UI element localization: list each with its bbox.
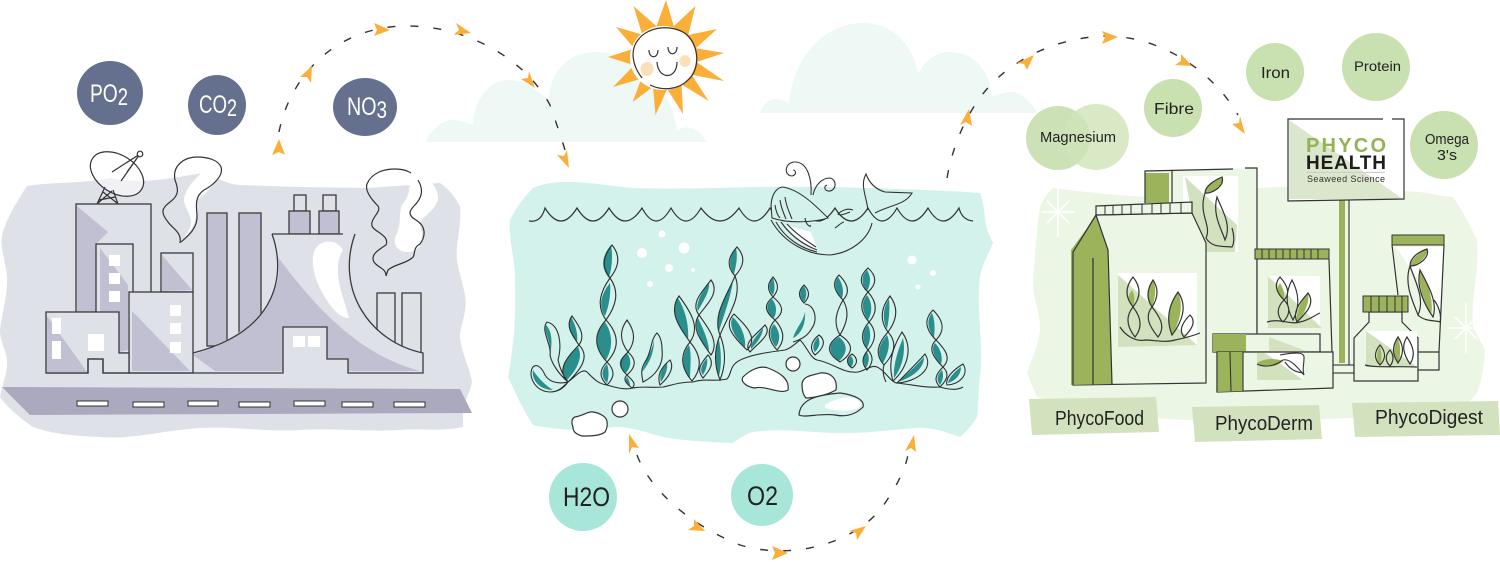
whale (771, 162, 912, 255)
pouch (1255, 249, 1332, 352)
bubble: CO2: 2 (227, 95, 237, 122)
sun (608, 0, 724, 115)
nutrient: Fibre: Fibre (1154, 101, 1194, 118)
sparkles (1041, 187, 1483, 353)
label: PhycoFood (1029, 397, 1159, 435)
signboard (1288, 119, 1404, 373)
nutrient: Fibre (1144, 79, 1202, 137)
seaweed leaves (533, 245, 961, 390)
bubble: O2: O2 (747, 481, 778, 511)
bubbles (637, 230, 936, 290)
back box (1145, 168, 1257, 340)
bubble: CO2 (188, 75, 246, 135)
rocks (572, 357, 863, 436)
panel: products (1027, 119, 1500, 442)
tube (1392, 235, 1444, 370)
logo text (1306, 135, 1386, 184)
bubble: H2O (549, 463, 617, 531)
arrow: city to sun (272, 23, 569, 168)
nutrient: Omega 3's: 3's (1437, 147, 1457, 164)
box (1213, 334, 1333, 392)
bubble: PO2 (77, 61, 143, 125)
label: PhycoDerm: PhycoDerm (1215, 413, 1313, 435)
smoke right (367, 168, 438, 276)
nutrient: Protein (1342, 33, 1410, 101)
bubble: PO2: PO (90, 80, 126, 108)
bubble: H2O: H2O (563, 482, 610, 512)
label: PhycoDigest: PhycoDigest (1375, 407, 1483, 429)
nutrient: Iron: Iron (1261, 65, 1290, 82)
panel: industrial city (0, 143, 472, 438)
seaweed outlines (531, 245, 965, 392)
nutrient: Magnesium: Magnesium (1040, 130, 1116, 146)
nutrient: Omega 3's (1410, 111, 1478, 179)
logo text: HEALTH (1306, 153, 1386, 174)
road (2, 387, 472, 415)
nutrient: Omega 3's: Omega (1425, 131, 1470, 148)
label: PhycoFood: PhycoFood (1055, 408, 1144, 430)
nutrient: Protein: Protein (1354, 58, 1401, 74)
logo text: Seaweed Science (1307, 174, 1385, 184)
arrow: ocean to products (947, 31, 1245, 178)
nutrient: Magnesium (1026, 104, 1129, 170)
smoke left (163, 157, 221, 243)
bubble: O2 (731, 464, 793, 526)
bubble: CO2: CO (199, 91, 236, 119)
carton (1071, 202, 1206, 385)
bubble: PO2: 2 (118, 84, 128, 111)
bubble: NO3: 3 (376, 97, 387, 124)
bubble: NO3: NO (347, 93, 384, 121)
arrow: ocean lower loop (629, 434, 916, 560)
nutrient: Iron (1246, 43, 1304, 101)
label: PhycoDerm (1192, 405, 1322, 442)
label: PhycoDigest (1352, 401, 1500, 437)
buildings (46, 195, 423, 373)
bottle (1354, 296, 1418, 381)
satellite dish (82, 143, 152, 205)
logo text: PHYCO (1306, 135, 1386, 157)
bubble: NO3 (333, 78, 397, 136)
panel: ocean (508, 162, 993, 443)
clouds (426, 23, 1037, 142)
waves (529, 208, 973, 221)
